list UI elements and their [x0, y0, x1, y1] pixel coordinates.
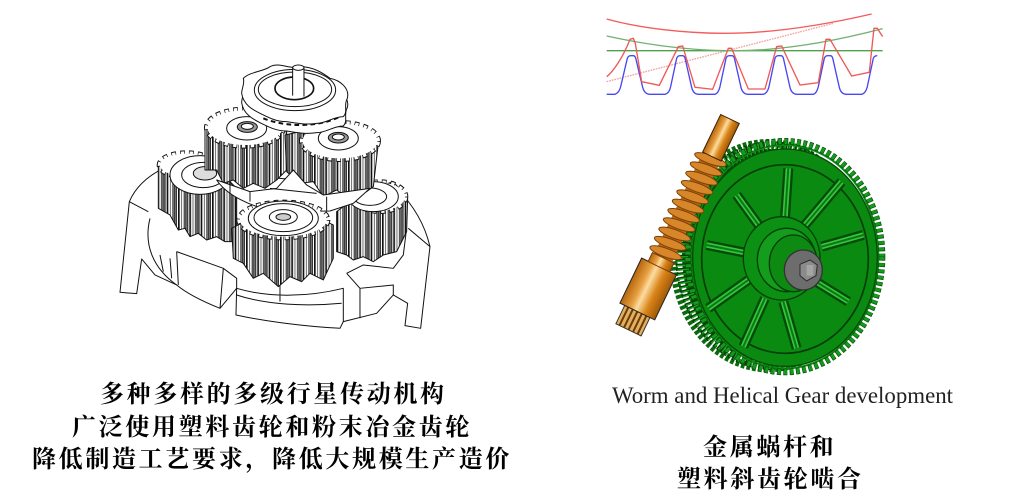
- gear face: [693, 149, 877, 366]
- caption: planetary gear: 多种多样的多级行星传动机构: [100, 381, 447, 408]
- tooth profile chart: [607, 14, 883, 94]
- worm and helical gear model: [611, 111, 882, 372]
- worm shaft: [611, 111, 747, 338]
- planetary gear line drawing: [120, 65, 430, 328]
- blue tooth profile: [607, 56, 877, 94]
- pitch line and curves: [607, 14, 883, 82]
- worm threads: [644, 147, 728, 274]
- bottom cylinder: [620, 258, 676, 320]
- grey boss: [784, 250, 822, 290]
- caption: planetary gear: 广泛使用塑料齿轮和粉末冶金齿轮: [72, 413, 472, 441]
- front teeth ring: [688, 141, 882, 372]
- spokes: [707, 168, 863, 348]
- hub: [743, 217, 820, 300]
- caption: worm gear: 金属蜗杆和: [703, 434, 836, 461]
- top cylinder: [703, 115, 739, 161]
- caption: worm gear: [677, 434, 864, 493]
- gear web: [702, 165, 868, 353]
- upper left planet gear: [205, 110, 287, 188]
- right planet gear: [337, 182, 408, 262]
- caption: planetary gear: [32, 381, 512, 473]
- deep helical teeth: [673, 143, 863, 368]
- upper right planet gear: [285, 122, 378, 198]
- red tooth profile: [607, 28, 883, 89]
- base plate: [120, 168, 430, 328]
- caption: planetary gear: 降低制造工艺要求，降低大规模生产造价: [32, 446, 512, 473]
- carrier plate: [217, 170, 370, 212]
- top plate and shaft: [242, 65, 348, 133]
- front planet gear: [232, 201, 333, 287]
- caption: worm gear: 塑料斜齿轮啮合: [677, 466, 864, 493]
- left planet gear: [158, 154, 237, 242]
- helical gear: [673, 141, 882, 372]
- pinion end: [616, 305, 650, 336]
- English caption: Worm and Helical Gear development: [612, 383, 954, 408]
